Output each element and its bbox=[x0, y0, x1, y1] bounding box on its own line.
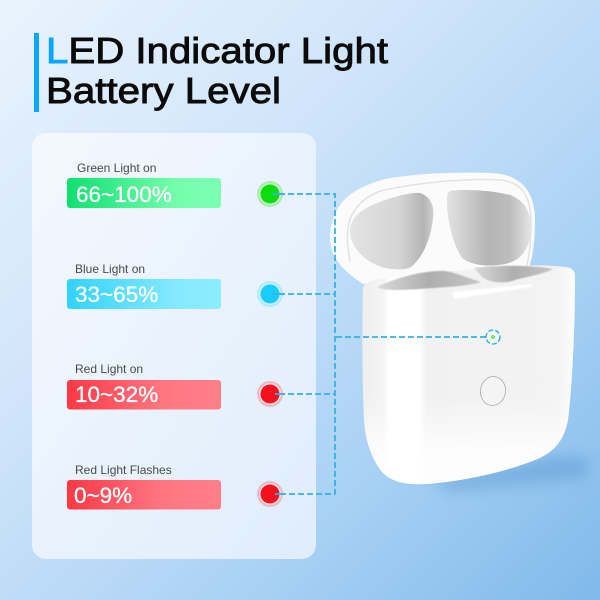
right charging well bbox=[474, 266, 553, 282]
red level label: Red Light on bbox=[75, 362, 143, 376]
pairing button bbox=[479, 375, 507, 407]
flashing red level bar: 0~9% bbox=[74, 483, 132, 508]
right earbud cavity bbox=[447, 190, 531, 266]
icon: charging case bbox=[330, 173, 590, 492]
title: LED Indicator Light bbox=[46, 30, 388, 71]
flashing red level label: Red Light Flashes bbox=[75, 463, 172, 477]
green level label: Green Light on bbox=[77, 161, 156, 175]
flashing red level bar bbox=[67, 480, 221, 510]
blue level bar bbox=[67, 279, 221, 309]
blue level label: Blue Light on bbox=[75, 262, 145, 276]
title accent bar bbox=[34, 33, 39, 112]
case body bbox=[362, 265, 575, 484]
red level bar: 10~32% bbox=[75, 382, 158, 407]
green level bar bbox=[67, 178, 221, 208]
left earbud cavity bbox=[350, 193, 433, 269]
left charging well bbox=[377, 271, 481, 290]
case lid bbox=[330, 173, 535, 284]
front notch bbox=[452, 284, 532, 299]
title bbox=[46, 30, 388, 111]
LED indicator marker bbox=[486, 330, 500, 344]
icon: flashing red light bbox=[257, 481, 284, 507]
blue level bar: 33~65% bbox=[75, 282, 158, 307]
icon: blue light bbox=[257, 281, 284, 307]
green level bar: 66~100% bbox=[76, 182, 172, 207]
icon: red light bbox=[257, 381, 284, 407]
title: Battery Level bbox=[46, 70, 281, 111]
panel: battery levels bbox=[32, 133, 316, 559]
red level bar bbox=[67, 380, 221, 410]
connector lines bbox=[270, 194, 487, 494]
case shadow bbox=[430, 456, 590, 492]
icon: green light bbox=[257, 181, 284, 207]
